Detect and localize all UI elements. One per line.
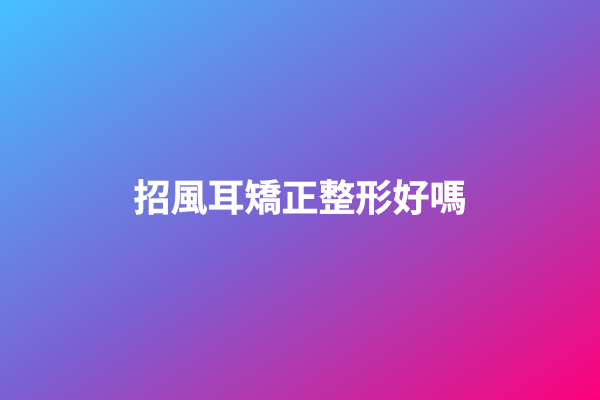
- title: 招風耳矯正整形好嗎: [134, 178, 466, 219]
